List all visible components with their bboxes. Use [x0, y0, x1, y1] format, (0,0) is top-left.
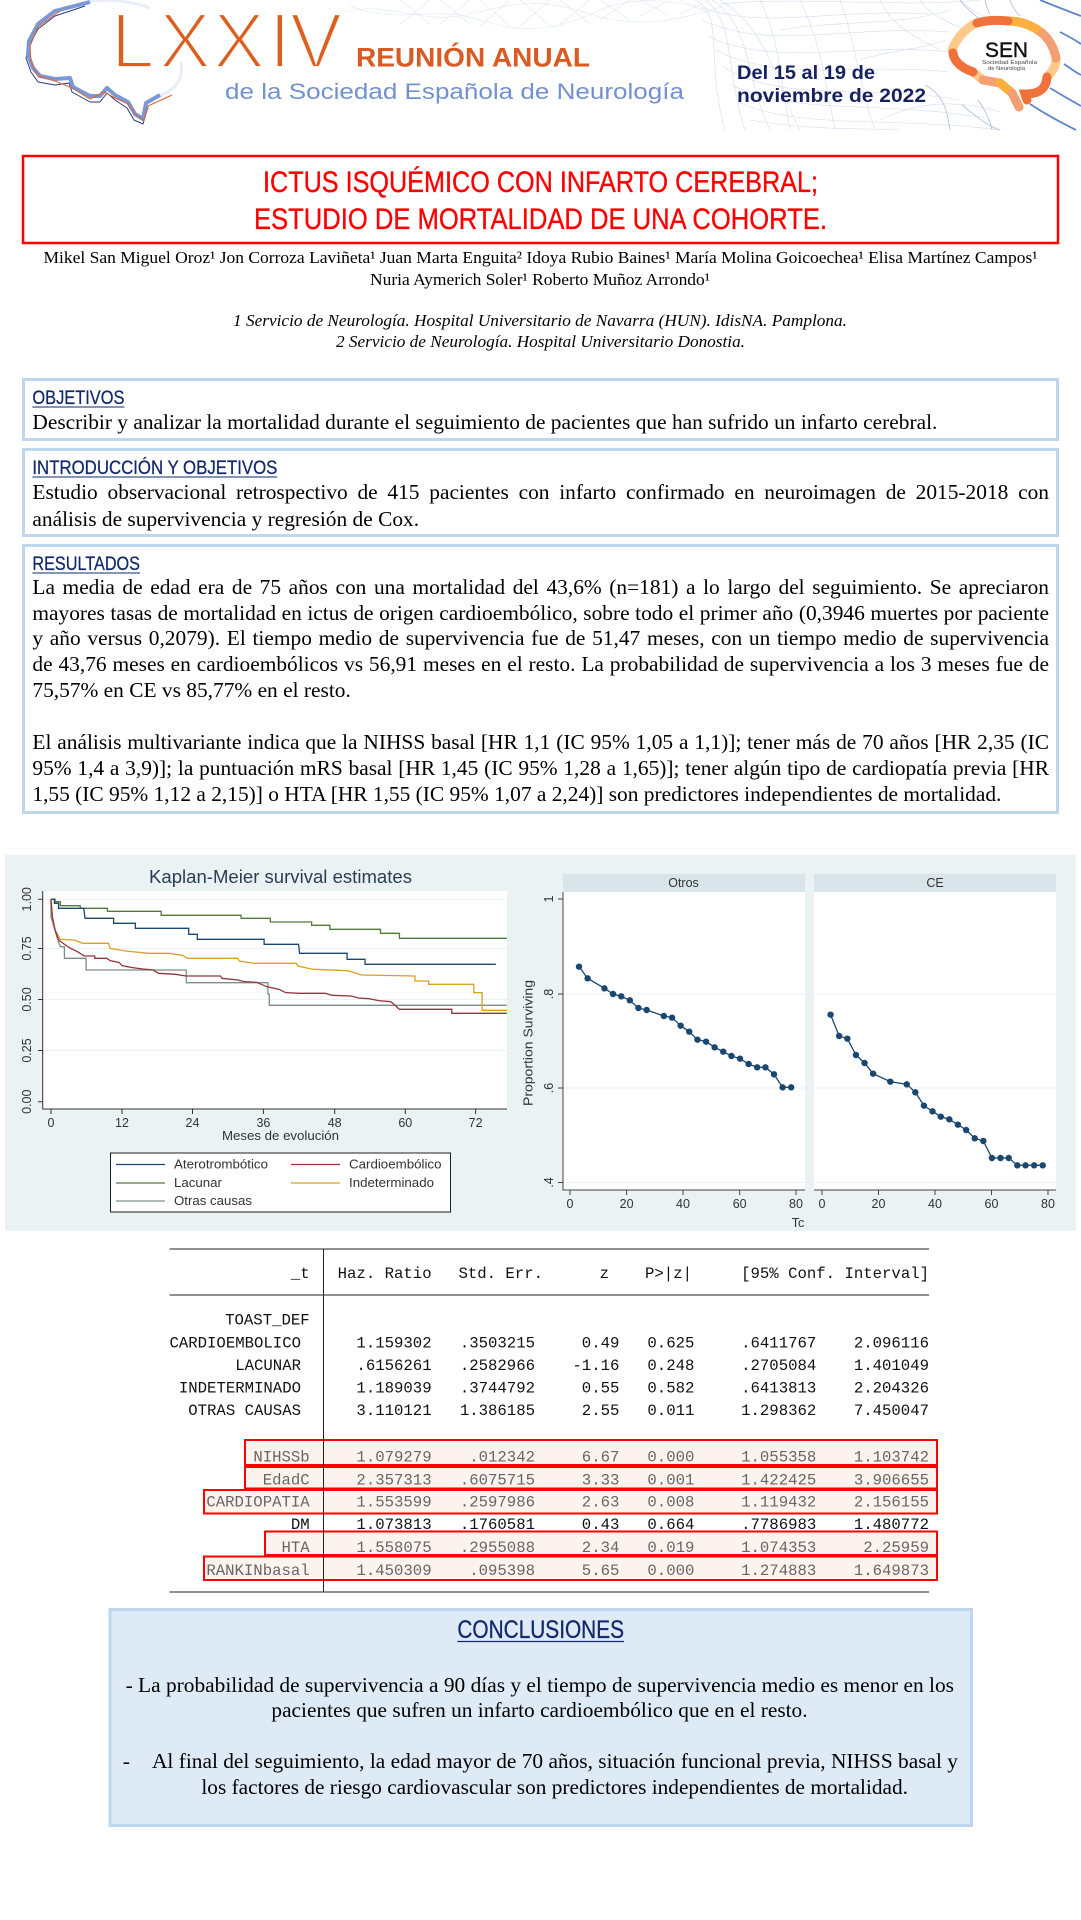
x axis labels: 20	[872, 1197, 885, 1211]
Cox regression table	[169, 1249, 937, 1592]
dates: noviembre de 2022	[737, 85, 926, 107]
SEN logo: de Neurología	[988, 66, 1025, 72]
rows: covariates: 0.43	[582, 1516, 619, 1534]
rows: TOAST: 1.189039	[356, 1379, 432, 1397]
legend: Cardioembólico	[349, 1158, 442, 1172]
rows: covariates: .2955088	[460, 1539, 535, 1557]
x axis labels: 20	[620, 1197, 634, 1211]
rows: covariates: 1.558075	[356, 1539, 432, 1557]
affiliations: 2 Servicio de Neurología. Hospital Universitario Donostia.	[336, 332, 745, 351]
panel: resultados	[24, 546, 1058, 812]
rows: TOAST	[169, 1311, 929, 1420]
rows: TOAST: .2705084	[741, 1357, 816, 1375]
x axis labels: 24	[186, 1116, 199, 1130]
rows: covariates: .1760581	[460, 1516, 535, 1534]
rows: covariates: 1.422425	[741, 1471, 816, 1489]
rows: TOAST: OTRAS CAUSAS	[188, 1402, 301, 1420]
legend: Otras causas	[174, 1194, 252, 1208]
x axis labels: 60	[985, 1197, 998, 1211]
panel: conclusiones	[110, 1610, 972, 1826]
y axis labels: 0.00	[20, 1089, 34, 1114]
conclusion 2: los factores de riesgo cardiovascular son predictores independientes de mortalidad.	[201, 1775, 908, 1799]
x axis labels	[567, 1197, 1055, 1211]
table header: _t	[290, 1265, 310, 1283]
y axis labels: 0.50	[20, 987, 34, 1012]
y axis labels	[542, 895, 556, 1188]
dates	[737, 62, 926, 107]
rows: covariates: HTA	[282, 1539, 310, 1557]
table header: P>|z|	[645, 1265, 692, 1283]
rows: covariates: 0.664	[647, 1516, 694, 1534]
x axis labels: 40	[928, 1197, 942, 1211]
panel: introducción y objetivos	[24, 450, 1058, 536]
rows: covariates: DM	[291, 1516, 310, 1534]
panel header: Otros: Otros	[668, 876, 699, 890]
x axis labels: 60	[398, 1116, 412, 1130]
table header	[290, 1265, 929, 1283]
rows: covariates: 1.450309	[356, 1562, 432, 1580]
conclusion 1	[126, 1673, 954, 1722]
rows: TOAST: .3744792	[460, 1379, 535, 1397]
rows: TOAST: 0.248	[647, 1357, 694, 1375]
rows: covariates: 1.480772	[854, 1516, 929, 1534]
y axis labels: 1.00	[20, 887, 34, 911]
rows: TOAST: CARDIOEMBOLICO	[169, 1334, 301, 1352]
rows: covariates	[206, 1448, 929, 1580]
conclusion 2: -	[123, 1749, 130, 1773]
rows: covariates: 1.079279	[356, 1448, 432, 1466]
rows: covariates: 0.019	[647, 1539, 694, 1557]
rows: covariates: 1.119432	[741, 1493, 816, 1511]
x axis title: Meses de evolución	[222, 1129, 339, 1143]
rows: TOAST: 0.582	[647, 1379, 694, 1397]
panel: resultados: 75,57% en CE vs 85,77% en el resto.	[32, 678, 351, 702]
x axis labels: 36	[256, 1116, 270, 1130]
rows: TOAST: 3.110121	[356, 1402, 432, 1420]
panel: introducción y objetivos: análisis de supervivencia y regresión de Cox.	[32, 507, 419, 531]
legend: Aterotrombótico	[174, 1158, 268, 1172]
rows: covariates: .095398	[469, 1562, 535, 1580]
rows: TOAST: .6156261	[356, 1357, 432, 1375]
rows: covariates: NIHSSb	[253, 1448, 310, 1466]
panel: introducción y objetivos: INTRODUCCIÓN Y OBJETIVOS	[32, 457, 277, 479]
series: Otros	[576, 963, 794, 1091]
rows: TOAST: .6413813	[741, 1379, 816, 1397]
rows: covariates: 1.649873	[854, 1562, 929, 1580]
rows: TOAST: -1.16	[572, 1357, 619, 1375]
rows: covariates: .012342	[469, 1448, 535, 1466]
y axis labels: .6	[542, 1083, 556, 1093]
rows: covariates: 1.055358	[741, 1448, 816, 1466]
rows: covariates: 0.008	[647, 1493, 694, 1511]
x axis labels: 12	[115, 1116, 129, 1130]
chart title: Kaplan-Meier survival estimates	[149, 867, 412, 887]
panel: resultados: 1,55 (IC 95% 1,12 a 2,15)] o HTA [HR 1,55 (IC 95% 1,07 a 2,24)] son predictores independientes de mortalidad.	[32, 782, 1001, 806]
x axis labels: 48	[328, 1116, 342, 1130]
chart: proportion surviving by group	[522, 874, 1056, 1230]
conclusion 2: Al final del seguimiento, la edad mayor de 70 años, situación funcional previa, NIHSS basal y	[152, 1749, 958, 1773]
legend: Indeterminado	[349, 1176, 434, 1190]
conclusion 1: - La probabilidad de supervivencia a 90 días y el tiempo de supervivencia medio es menor en los	[126, 1673, 954, 1697]
legend: Lacunar	[174, 1176, 222, 1190]
rows: TOAST: 1.159302	[356, 1334, 432, 1352]
x axis title: Tc	[792, 1216, 804, 1230]
y axis labels: 0.25	[20, 1038, 34, 1063]
authors	[44, 248, 1038, 289]
table header: Std. Err.	[458, 1265, 543, 1283]
chart: Kaplan-Meier	[20, 867, 507, 1212]
panel: objetivos: Describir y analizar la mortalidad durante el seguimiento de pacientes que han sufrido un infarto cerebral.	[32, 410, 937, 434]
table header: z	[600, 1265, 609, 1283]
x axis labels: 80	[789, 1197, 803, 1211]
rows: covariates: 3.33	[582, 1471, 619, 1489]
rows: covariates: 0.000	[647, 1562, 694, 1580]
rows: TOAST: LACUNAR	[235, 1357, 301, 1375]
rows: covariates: 0.000	[647, 1448, 694, 1466]
rows: covariates: 1.103742	[854, 1448, 929, 1466]
SEN logo	[952, 20, 1056, 107]
rows: covariates: 2.63	[582, 1493, 619, 1511]
SEN logo: Sociedad Española	[982, 60, 1037, 66]
rows: TOAST: 1.386185	[460, 1402, 535, 1420]
rows: TOAST: TOAST_DEF	[225, 1311, 310, 1329]
y axis title: Proportion Surviving	[522, 980, 536, 1106]
x axis labels: 72	[469, 1116, 483, 1130]
brain outline logo	[26, 0, 181, 124]
panel: survival charts	[5, 855, 1076, 1231]
rows: covariates: 3.906655	[854, 1471, 929, 1489]
x axis labels: 80	[1041, 1197, 1055, 1211]
panel: resultados: RESULTADOS	[32, 554, 140, 575]
panel: introducción y objetivos: Estudio observacional retrospectivo de 415 pacientes con infarto confirmado en neuroimagen de 2015-2018 con	[32, 480, 1049, 504]
legend	[110, 1153, 450, 1212]
SEN logo: SEN	[985, 39, 1028, 62]
panel: objetivos	[24, 380, 1058, 440]
rows: TOAST: INDETERMINADO	[179, 1379, 301, 1397]
rows: covariates: 2.34	[582, 1539, 619, 1557]
rows: TOAST: 0.49	[582, 1334, 619, 1352]
panel header: Otros	[563, 874, 805, 892]
panel: resultados: 95% 1,4 a 3,9)]; la puntuación mRS basal [HR 1,45 (IC 95% 1,28 a 1,65)]; tener algún tipo de cardiopatía previa [HR	[32, 756, 1049, 780]
rows: covariates: 2.357313	[356, 1471, 432, 1489]
rows: TOAST: .2582966	[460, 1357, 535, 1375]
affiliations	[233, 311, 847, 351]
title box	[23, 156, 1058, 243]
title box: ESTUDIO DE MORTALIDAD DE UNA COHORTE.	[254, 203, 827, 236]
rows: covariates: 1.074353	[741, 1539, 816, 1557]
conclusion 2	[123, 1749, 958, 1799]
series: CE	[827, 1011, 1046, 1169]
rows: covariates: 2.156155	[854, 1493, 929, 1511]
society name: de la Sociedad Española de Neurología	[225, 79, 685, 104]
rows: TOAST: 0.625	[647, 1334, 694, 1352]
x axis labels: 60	[733, 1197, 747, 1211]
rows: TOAST: 7.450047	[854, 1402, 929, 1420]
y axis labels: .4	[542, 1177, 556, 1188]
panel header: CE: CE	[926, 876, 944, 890]
authors: Nuria Aymerich Soler¹ Roberto Muñoz Arrondo¹	[370, 270, 710, 289]
rows: covariates: 1.553599	[356, 1493, 432, 1511]
y axis labels: 0.75	[20, 936, 34, 961]
meeting name: REUNIÓN ANUAL	[356, 42, 590, 72]
rows: covariates: 5.65	[582, 1562, 619, 1580]
panel: resultados: mayores tasas de mortalidad en ictus de origen cardioembólico, sobre todo el primer año (0,3946 muertes por paciente	[32, 601, 1049, 625]
x axis labels: 0	[48, 1116, 55, 1130]
rows: TOAST: 2.55	[582, 1402, 619, 1420]
panel: resultados: El análisis multivariante indica que la NIHSS basal [HR 1,1 (IC 95% 1,05 a 1,1)]; tener más de 70 años [HR 2,35 (IC	[32, 730, 1049, 754]
y axis labels	[20, 887, 34, 1114]
rows: covariates: .6075715	[460, 1471, 535, 1489]
panel: resultados: de 43,76 meses en cardioembólicos vs 56,91 meses en el resto. La probabilidad de supervivencia a los 3 meses fue de	[32, 652, 1049, 676]
x axis labels: 40	[676, 1197, 690, 1211]
conclusion 1: pacientes que sufren un infarto cardioembólico que en el resto.	[271, 1698, 808, 1722]
survival curves	[51, 899, 507, 1013]
rows: covariates: .2597986	[460, 1493, 535, 1511]
highlighted rows	[204, 1440, 937, 1580]
rows: covariates: 1.274883	[741, 1562, 816, 1580]
y axis labels: 1	[542, 895, 556, 902]
rows: TOAST: .3503215	[460, 1334, 535, 1352]
x axis labels: 0	[819, 1197, 826, 1211]
table header: [95% Conf. Interval]	[741, 1265, 929, 1283]
rows: covariates: 0.001	[647, 1471, 694, 1489]
rows: TOAST: .6411767	[741, 1334, 816, 1352]
panel: objetivos: OBJETIVOS	[32, 388, 124, 409]
x axis labels: 0	[567, 1197, 574, 1211]
affiliations: 1 Servicio de Neurología. Hospital Universitario de Navarra (HUN). IdisNA. Pamplona.	[233, 311, 847, 330]
panel: resultados: La media de edad era de 75 años con una mortalidad del 43,6% (n=181) a lo largo del seguimiento. Se apreciaron	[32, 575, 1049, 599]
authors: Mikel San Miguel Oroz¹ Jon Corroza Laviñeta¹ Juan Marta Enguita² Idoya Rubio Baines¹ María Molina Goicoechea¹ Elisa Martínez Campos¹	[44, 248, 1038, 267]
rows: TOAST: 0.011	[647, 1402, 694, 1420]
panel: resultados: y año versus 0,2079). El tiempo medio de supervivencia fue de 51,47 meses, con un tiempo medio de supervivencia	[32, 626, 1049, 650]
rows: TOAST: 2.204326	[854, 1379, 929, 1397]
rows: TOAST: 1.298362	[741, 1402, 816, 1420]
rows: covariates: 2.25959	[863, 1539, 929, 1557]
wave pattern background	[345, 0, 1081, 130]
rows: covariates: 6.67	[582, 1448, 619, 1466]
panel header: CE	[814, 874, 1056, 892]
table header: Haz. Ratio	[338, 1265, 432, 1283]
x axis labels	[48, 1116, 483, 1130]
rows: covariates: RANKINbasal	[206, 1562, 310, 1580]
y axis labels: .8	[542, 989, 556, 999]
rows: TOAST: 0.55	[582, 1379, 619, 1397]
rows: covariates: EdadC	[263, 1471, 310, 1489]
header banner	[26, 0, 1081, 130]
title box: ICTUS ISQUÉMICO CON INFARTO CEREBRAL;	[263, 166, 818, 199]
dates: Del 15 al 19 de	[737, 62, 875, 84]
rows: covariates: CARDIOPATIA	[206, 1493, 310, 1511]
conclusions heading: CONCLUSIONES	[457, 1616, 624, 1644]
rows: covariates: 1.073813	[356, 1516, 432, 1534]
rows: TOAST: 2.096116	[854, 1334, 929, 1352]
rows: covariates: .7786983	[741, 1516, 816, 1534]
rows: TOAST: 1.401049	[854, 1357, 929, 1375]
